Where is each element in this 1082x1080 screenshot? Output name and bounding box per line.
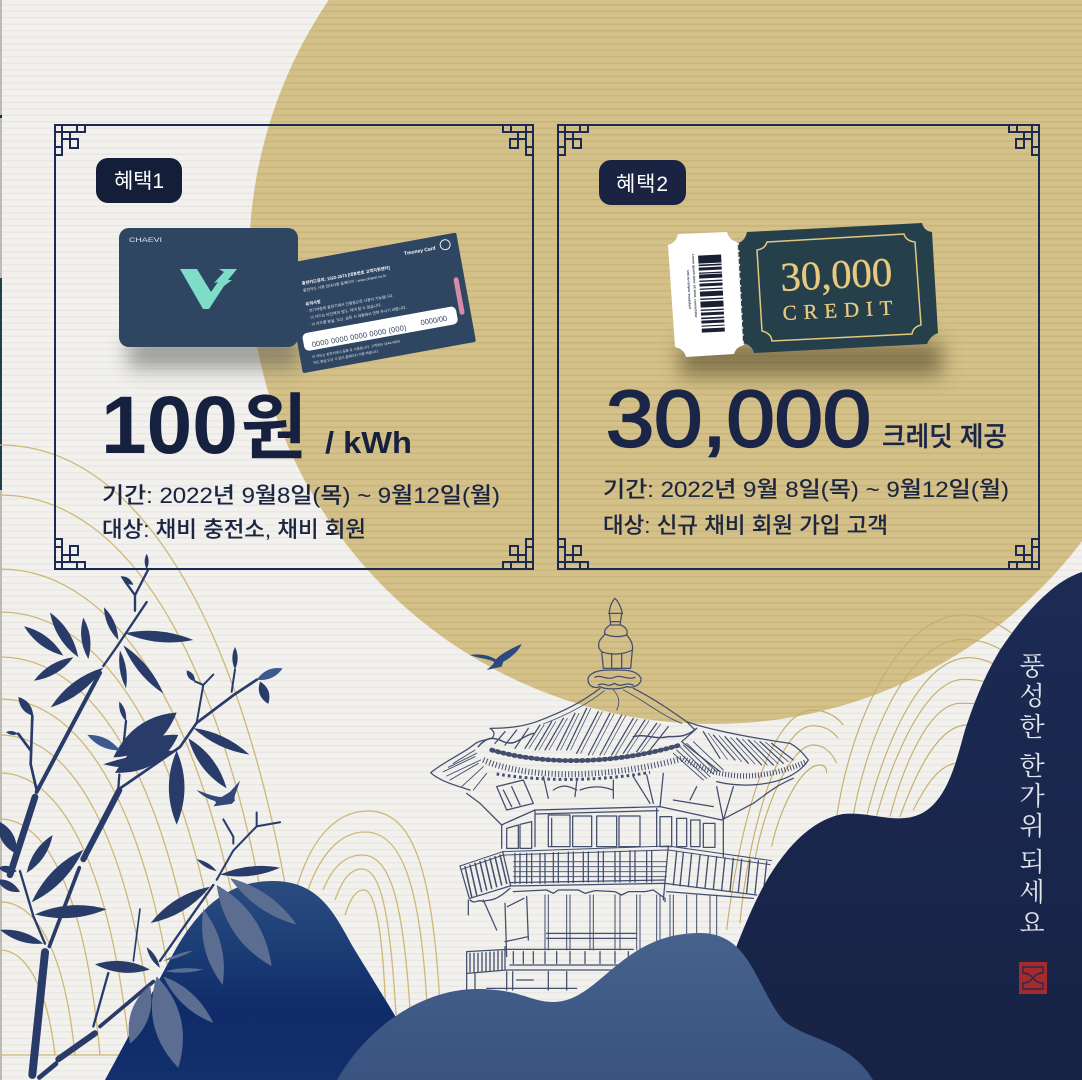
bamboo mid-blue leaves <box>87 668 283 750</box>
tag: benefit 1: 혜택1 <box>114 170 164 193</box>
gold wave lines: left large arches <box>0 445 310 1055</box>
ticket fine print <box>686 254 698 318</box>
vertical greeting text: 되 <box>1019 842 1045 879</box>
pagoda roof <box>431 688 808 790</box>
vertical greeting text: 성 <box>1019 676 1045 713</box>
vertical greeting text: 세 <box>1019 872 1045 909</box>
vertical greeting text: 한 <box>1019 746 1045 783</box>
charge card, back side: · 이 카드는 타인에게 양도, 대여 할 수 없습니다. <box>308 302 382 320</box>
gold wave lines: right arches <box>727 615 1012 930</box>
ticket body <box>738 223 938 353</box>
period and target of benefit 2: 기간: 2022년 9월 8일(목) ~ 9월12일(월) <box>603 477 1009 502</box>
ticket value: CREDIT <box>782 296 893 325</box>
charge card, back side: 유의사항 <box>305 298 321 308</box>
amount: 30,000 credit: 크레딧 제공 <box>882 422 1007 452</box>
charge card, back side: 충전카드 사용 안내사항 홈페이지 : www.chaevi.co.kr <box>303 273 387 293</box>
charge card, back side: 이 카드는 충전기에서 등록 후 사용합니다. 고객센터 1544-0000 <box>312 338 400 359</box>
charge card, back side <box>283 233 476 373</box>
vertical greeting text: 요 <box>1019 903 1045 940</box>
charge card, back side: · 전기차량의 충전기에서 인증용으로 사용이 가능합니다. <box>306 293 394 313</box>
bamboo illustration <box>0 554 297 1078</box>
period and target of benefit 1: 기간: 2022년 9월8일(목) ~ 9월12일(월) <box>102 483 500 508</box>
pagoda brackets and upper floor <box>467 773 793 857</box>
left edge strip <box>0 0 2 1080</box>
pagoda balcony <box>460 846 772 915</box>
charge card, front side <box>119 228 298 347</box>
bamboo dark leaves <box>0 554 280 973</box>
price: 100 won per kWh: / kWh <box>325 425 412 460</box>
credit ticket <box>668 223 938 357</box>
charge card, front side: CHAEVI <box>129 238 162 244</box>
ticket value <box>779 249 893 325</box>
bamboo pale leaves over the hill <box>129 878 297 1068</box>
panel: benefit 1 <box>55 125 533 569</box>
charge card, back side: 0000/00 <box>420 314 448 327</box>
vertical greeting text: 한 <box>1019 707 1045 744</box>
charge card, back side: 0000 0000 0000 0000 (000) <box>311 323 407 349</box>
bird in flight <box>470 644 522 670</box>
period and target of benefit 1 <box>102 483 500 542</box>
tag: benefit 1 <box>96 158 182 203</box>
charge card, back side: 충전카드문의: 1522-2573 [대표번호 고객지원센터] <box>301 264 391 287</box>
amount: 30,000 credit <box>606 374 1007 463</box>
pagoda line drawing <box>431 598 808 992</box>
pagoda lower floor <box>467 895 717 992</box>
price: 100 won per kWh: 100원 <box>101 380 307 471</box>
ticket fine print: sed do tempor incididunt <box>686 270 692 310</box>
ticket perforation <box>738 243 743 343</box>
charge card, back side: 카드 분실 도난 시 인터 홈페이지 이용 바랍니다. <box>313 348 379 365</box>
blue hill, left <box>105 881 410 1080</box>
charge card, back side: Tmoney Card <box>404 246 436 257</box>
charge card, back side: · 이 카드를 분실, 도난, 습득 시 대형에서 연락 주시기 바랍니다. <box>309 305 407 327</box>
ticket shadow <box>680 342 942 376</box>
ticket fine print: Lorem ipsum dolor sit amet, consectetur <box>691 254 698 318</box>
vertical greeting text: 위 <box>1019 806 1045 843</box>
ticket value: 30,000 <box>779 249 893 300</box>
tag: benefit 2: 혜택2 <box>616 173 668 196</box>
ticket gold frame <box>757 234 921 341</box>
bamboo stems and twigs <box>10 569 280 1078</box>
slate blue hill, centre <box>337 933 873 1080</box>
vertical greeting text: 풍 <box>1019 646 1045 683</box>
vertical greeting text <box>1019 646 1045 940</box>
tag: benefit 2 <box>599 160 686 205</box>
amount: 30,000 credit: 30,000 <box>606 374 871 463</box>
ticket stub <box>668 232 744 357</box>
card shadow <box>128 338 300 368</box>
small bird among the bamboo <box>197 781 240 806</box>
frame of benefit 2 <box>558 125 1039 569</box>
dark navy hill, right <box>700 572 1082 1080</box>
golden full moon <box>249 0 1082 724</box>
red seal stamp <box>1019 962 1047 994</box>
period and target of benefit 2 <box>603 477 1009 538</box>
ticket barcode <box>698 255 725 333</box>
period and target of benefit 2: 대상: 신규 채비 회원 가입 고객 <box>603 513 888 538</box>
pagoda finial <box>588 598 641 689</box>
vertical greeting text: 가 <box>1019 776 1045 813</box>
gold wave lines: small arches beside the pagoda <box>296 811 440 1018</box>
price: 100 won per kWh <box>101 380 412 471</box>
period and target of benefit 1: 대상: 채비 충전소, 채비 회원 <box>102 517 366 542</box>
frame of benefit 1 <box>55 125 533 569</box>
panel: benefit 2 <box>558 125 1039 569</box>
